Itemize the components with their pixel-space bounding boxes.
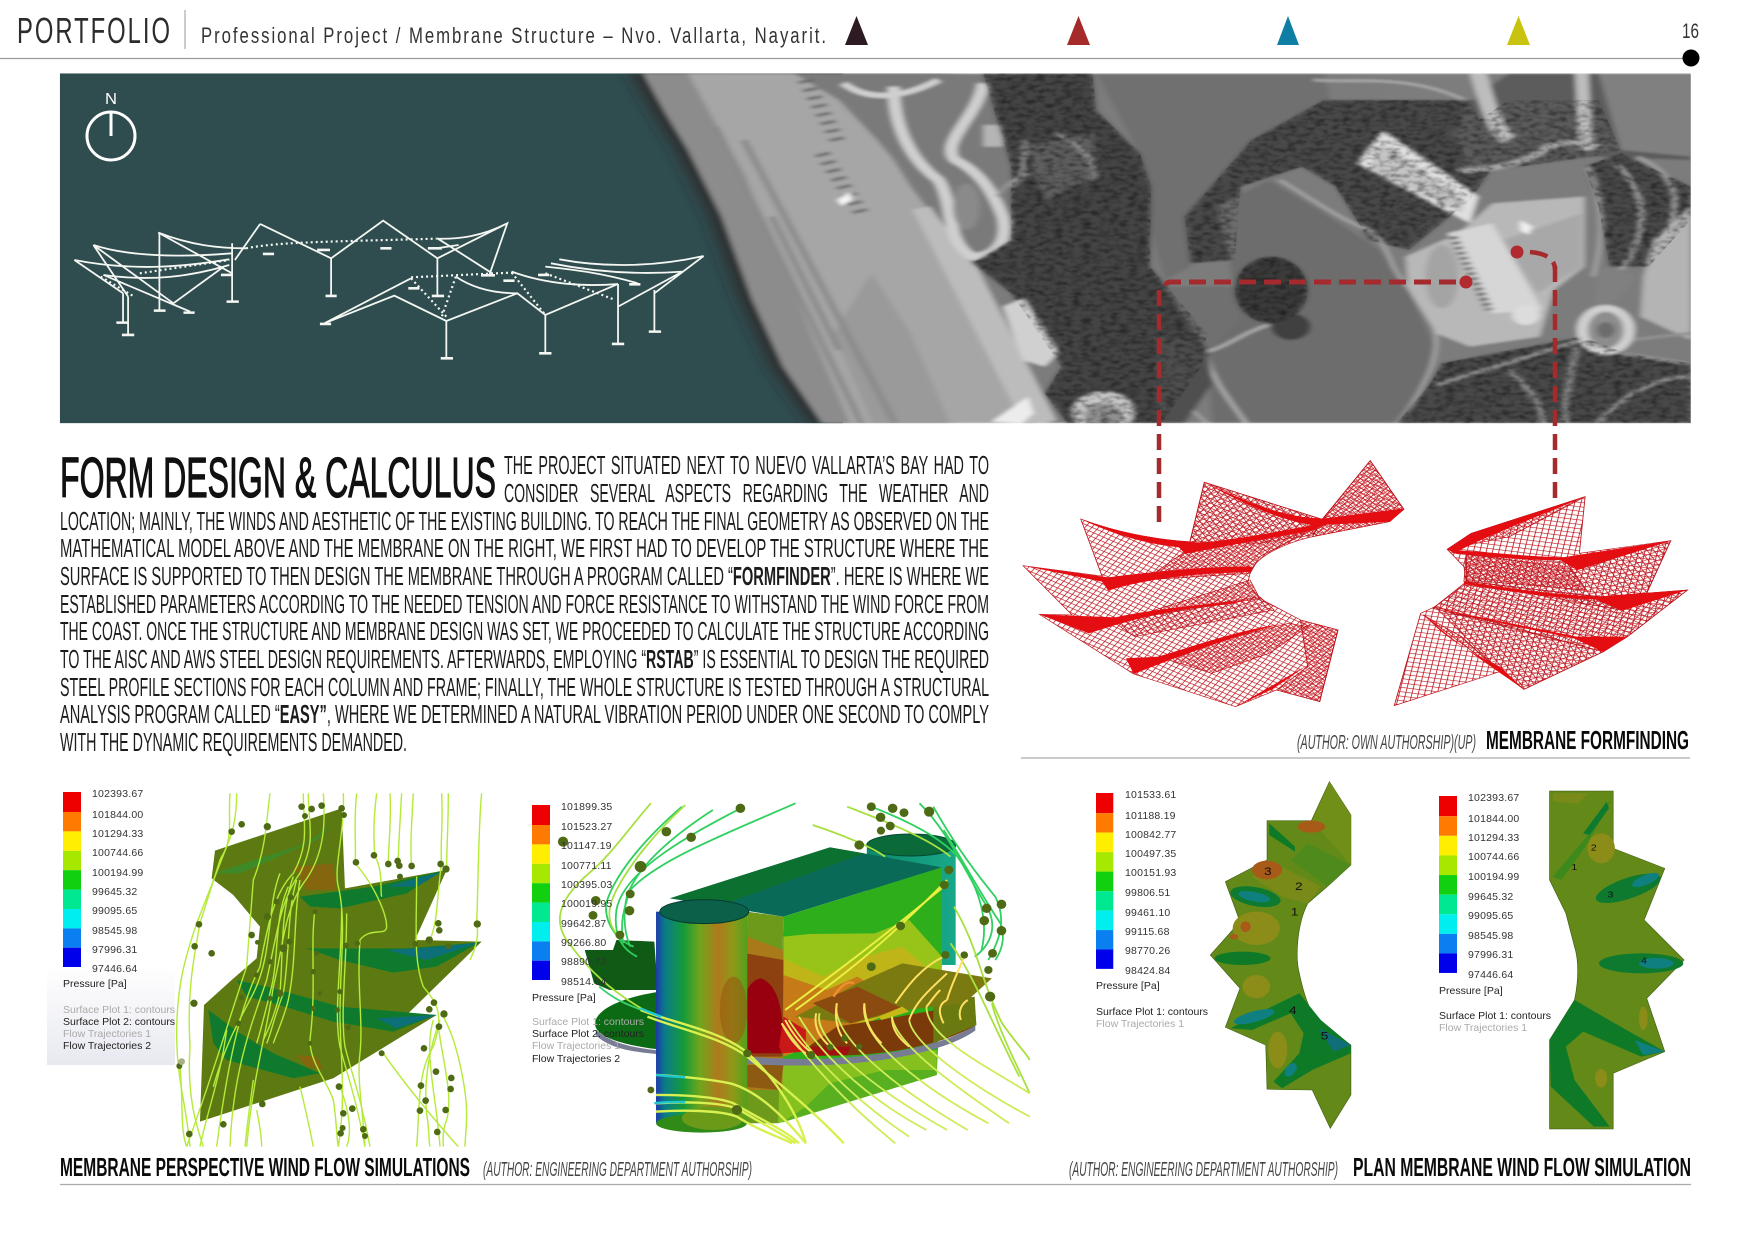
legend: pressure scale: Flow Trajectories 1 [1439,1022,1527,1034]
legend: pressure scale: 98514.64 [561,976,606,988]
simulation 4: plan membrane: 1 [1571,863,1577,872]
legend: pressure scale: 101294.33 [1468,832,1519,844]
legend: pressure scale: 100497.35 [1125,848,1176,860]
legend: pressure scale: 101294.33 [92,828,143,840]
legend: pressure scale: Pressure [Pa] [63,978,127,990]
north arrow [87,91,135,160]
legend: pressure scale: 98770.26 [1125,945,1170,957]
body text: WITH THE DYNAMIC REQUIREMENTS DEMANDED. [60,727,407,757]
legend: pressure scale: 97996.31 [1468,949,1513,961]
legend: pressure scale [532,801,644,1065]
white structure drawing [74,221,704,358]
header [0,10,1700,66]
caption: perspective simulations: (AUTHOR: ENGINEERING DEPARTMENT AUTHORSHIP) [483,1159,752,1181]
aerial site photo [60,73,1700,432]
legend: pressure scale: Pressure [Pa] [1096,980,1160,992]
membrane formfinding mesh [1023,461,1688,707]
body text: ANALYSIS PROGRAM CALLED “EASY”, WHERE WE DETERMINED A NATURAL VIBRATION PERIOD UNDER ONE SECOND TO COMPLY [60,699,989,729]
legend: pressure scale: 100194.99 [92,867,143,879]
legend: pressure scale: Flow Trajectories 2 [63,1040,151,1052]
mesh: left membrane [1023,461,1404,707]
legend: pressure scale: 99095.65 [1468,910,1513,922]
legend: pressure scale: Flow Trajectories 1 [532,1040,620,1052]
legend: pressure scale: 101899.35 [561,801,612,813]
legend: pressure scale: 97446.64 [92,963,137,975]
caption: plan simulation [60,1152,1691,1184]
body text: LOCATION; MAINLY, THE WINDS AND AESTHETIC OF THE EXISTING BUILDING. TO REACH THE FINAL GEOMETRY AS OBSERVED ON THE [60,506,989,536]
legend: pressure scale: Pressure [Pa] [532,992,596,1004]
front cylinder [656,900,749,1133]
body text: MATHEMATICAL MODEL ABOVE AND THE MEMBRANE ON THE RIGHT, WE FIRST HAD TO DEVELOP THE STRUCTURE WHERE THE [60,533,989,563]
legend: pressure scale: 100771.11 [561,860,612,872]
legend: pressure scale: 98890.72 [561,956,606,968]
simulation 3: plan membrane: 1 [1291,906,1299,918]
icon: blue triangle [1277,16,1299,45]
seed markers [558,802,1006,1115]
legend: pressure scale: 99266.80 [561,937,606,949]
legend: pressure scale: 101147.19 [561,840,612,852]
legend: pressure scale: 100744.66 [92,847,143,859]
legend: pressure scale: 101844.00 [92,809,143,821]
legend: pressure scale: Surface Plot 1: contours [1096,1006,1208,1018]
legend: pressure scale: Flow Trajectories 1 [1096,1018,1184,1030]
simulation 3: plan membrane: 3 [1264,865,1272,878]
page marker dot [1682,50,1700,66]
legend: pressure scale: 99642.87 [561,918,606,930]
plate and membranes [585,940,992,1066]
body text: STEEL PROFILE SECTIONS FOR EACH COLUMN AND FRAME; FINALLY, THE WHOLE STRUCTURE IS TESTED THROUGH A STRUCTURAL [60,672,989,702]
legend: pressure scale: Surface Plot 2: contours [63,1016,175,1028]
icon: red triangle [1067,16,1090,45]
legend: pressure scale: 102393.67 [1468,792,1519,804]
simulation 3: plan membrane: 2 [1295,880,1303,893]
portfolio title: PORTFOLIO [17,10,172,51]
simulation 2: building perspective [532,801,1030,1143]
legend: pressure scale: Flow Trajectories 2 [532,1053,620,1065]
legend panel shade [47,965,175,1065]
legend: pressure scale: 99645.32 [92,886,137,898]
simulation 4: plan membrane [1439,791,1684,1129]
simulation 3: plan membrane: 4 [1289,1004,1297,1017]
legend: pressure scale: Surface Plot 1: contours [63,1004,175,1016]
legend: pressure scale: 101188.19 [1125,810,1176,822]
legend: pressure scale: 101533.61 [1125,789,1176,801]
legend: pressure scale: Surface Plot 2: contours [532,1028,644,1040]
building box [670,847,942,1123]
legend: pressure scale: Surface Plot 1: contours [1439,1010,1551,1022]
mesh: right membrane [1394,497,1688,706]
legend: pressure scale: 99095.65 [92,905,137,917]
caption: perspective simulations: MEMBRANE PERSPECTIVE WIND FLOW SIMULATIONS [60,1152,470,1182]
icon: dark triangle [845,16,868,45]
legend: pressure scale: 97446.64 [1468,969,1513,981]
legend: pressure scale: 101844.00 [1468,813,1519,825]
body text: THE COAST. ONCE THE STRUCTURE AND MEMBRANE DESIGN WAS SET, WE PROCEEDED TO CALCULATE THE STRUCTURE ACCORDING [60,616,989,646]
legend: pressure scale: Surface Plot 1: contours [532,1016,644,1028]
body text: TO THE AISC AND AWS STEEL DESIGN REQUIREMENTS. AFTERWARDS, EMPLOYING “RSTAB” IS ESSENTIAL TO DESIGN THE REQUIRED [60,644,989,674]
heading: FORM DESIGN & CALCULUS [60,446,496,510]
legend: pressure scale [1096,789,1208,1030]
caption: membrane formfinding: (AUTHOR: OWN AUTHORSHIP)(UP) [1297,732,1476,754]
legend: pressure scale: 97996.31 [92,944,137,956]
body text: THE PROJECT SITUATED NEXT TO NUEVO VALLARTA’S BAY HAD TO [504,450,989,480]
legend: pressure scale: 100194.99 [1468,871,1519,883]
legend: pressure scale: 100151.93 [1125,867,1176,879]
simulation 4: plan membrane: 2 [1591,844,1597,852]
legend: pressure scale: 98545.98 [1468,930,1513,942]
simulation 4: plan membrane: 4 [1641,956,1647,965]
legend: pressure scale: 98424.84 [1125,965,1170,977]
legend: pressure scale: 100395.03 [561,879,612,891]
rear cylinder [867,834,956,965]
legend: pressure scale: 100842.77 [1125,829,1176,841]
caption: membrane formfinding [1021,725,1690,758]
legend: pressure scale: 99115.68 [1125,926,1170,938]
legend: pressure scale: 99806.51 [1125,887,1170,899]
body text: CONSIDER SEVERAL ASPECTS REGARDING THE WEATHER AND [504,478,989,508]
body text: SURFACE IS SUPPORTED TO THEN DESIGN THE MEMBRANE THROUGH A PROGRAM CALLED “FORMFINDER”. HERE IS WHERE WE [60,561,989,591]
legend: pressure scale [63,788,175,1052]
legend: pressure scale: 100019.95 [561,898,612,910]
legend: pressure scale: Pressure [Pa] [1439,985,1503,997]
dashed site connector [1159,246,1555,527]
legend: pressure scale: 101523.27 [561,821,612,833]
legend: pressure scale: 102393.67 [92,788,143,800]
legend: pressure scale: 100744.66 [1468,851,1519,863]
project subtitle: Professional Project / Membrane Structure – Nvo. Vallarta, Nayarit. [201,23,828,48]
simulation 1: membrane perspective [47,788,482,1147]
legend: pressure scale: 99461.10 [1125,907,1170,919]
simulation 4: plan membrane: 3 [1608,890,1613,899]
simulation 3: plan membrane: 5 [1321,1030,1329,1042]
legend: pressure scale: Flow Trajectories 1 [63,1028,151,1040]
body text [60,450,989,757]
plate: left side [595,990,747,1053]
legend: pressure scale: 99645.32 [1468,891,1513,903]
north arrow: N [105,91,117,108]
body text: ESTABLISHED PARAMETERS ACCORDING TO THE NEEDED TENSION AND FORCE RESISTANCE TO WITHSTAND THE WIND FORCE FROM [60,589,989,619]
icon: yellow triangle [1507,16,1530,45]
caption: plan simulation: (AUTHOR: ENGINEERING DEPARTMENT AUTHORSHIP) [1069,1159,1338,1181]
streamlines [560,803,1030,1143]
page number: 16 [1682,20,1699,43]
simulation 3: plan membrane [1096,782,1351,1128]
legend: pressure scale: 98545.98 [92,925,137,937]
legend: pressure scale [1439,792,1551,1034]
